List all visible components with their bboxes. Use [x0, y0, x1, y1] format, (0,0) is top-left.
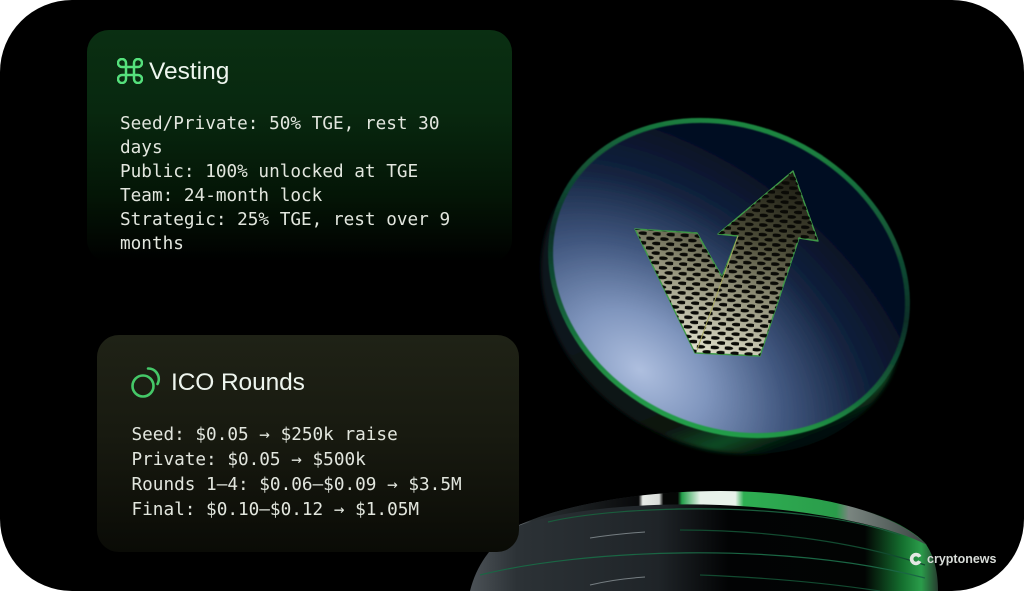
ICO rounds text block	[132, 425, 462, 520]
panel: Vesting	[87, 30, 512, 262]
coin rim	[494, 59, 964, 497]
watermark: cryptonews logo	[910, 552, 996, 566]
vesting text block: Strategic: 25% TGE, rest over 9	[120, 210, 450, 230]
bottom coin stack	[470, 491, 938, 591]
arrow check emblem	[635, 171, 818, 356]
vesting text block: Team: 24-month lock	[120, 186, 322, 206]
vesting text block	[120, 114, 450, 254]
coin edge	[487, 75, 957, 513]
icon: cryptonews mark	[910, 552, 922, 566]
heading: Vesting: Vesting	[149, 58, 229, 85]
heading: ICO Rounds: ICO Rounds	[171, 369, 305, 396]
vesting text block: days	[120, 138, 163, 158]
vesting text block: months	[120, 234, 184, 254]
ICO rounds text block: Seed: $0.05 → $250k raise	[132, 425, 398, 445]
panel: ICO Rounds	[97, 335, 519, 552]
ICO rounds text block: Rounds 1–4: $0.06–$0.09 → $3.5M	[132, 475, 462, 495]
top coin	[487, 59, 964, 513]
ICO rounds text block: Private: $0.05 → $500k	[132, 450, 366, 470]
vesting text block: Public: 100% unlocked at TGE	[120, 162, 418, 182]
coin face	[501, 65, 957, 491]
icon: overlapping circles	[131, 367, 160, 398]
vesting text block: Seed/Private: 50% TGE, rest 30	[120, 114, 439, 134]
watermark text: cryptonews	[927, 552, 996, 566]
icon: command symbol	[117, 58, 143, 84]
ICO rounds text block: Final: $0.10–$0.12 → $1.05M	[132, 500, 419, 520]
stack top rim	[515, 491, 927, 545]
